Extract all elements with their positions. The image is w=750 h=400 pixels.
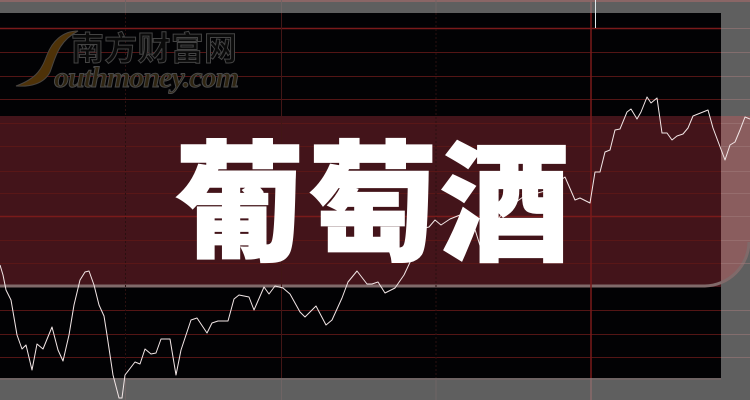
title: 酒 (440, 132, 570, 278)
logo Chinese name: 南方财富网 (71, 30, 237, 67)
title (175, 132, 570, 278)
banner panel (0, 116, 750, 287)
logo: southmoney watermark (16, 30, 239, 94)
line chart (0, 97, 750, 398)
top tick mark (594, 0, 596, 28)
logo domain name: outhmoney.com (54, 61, 239, 94)
title: 萄 (308, 132, 438, 278)
title: 葡 (175, 132, 305, 278)
logo swoosh (16, 31, 78, 86)
